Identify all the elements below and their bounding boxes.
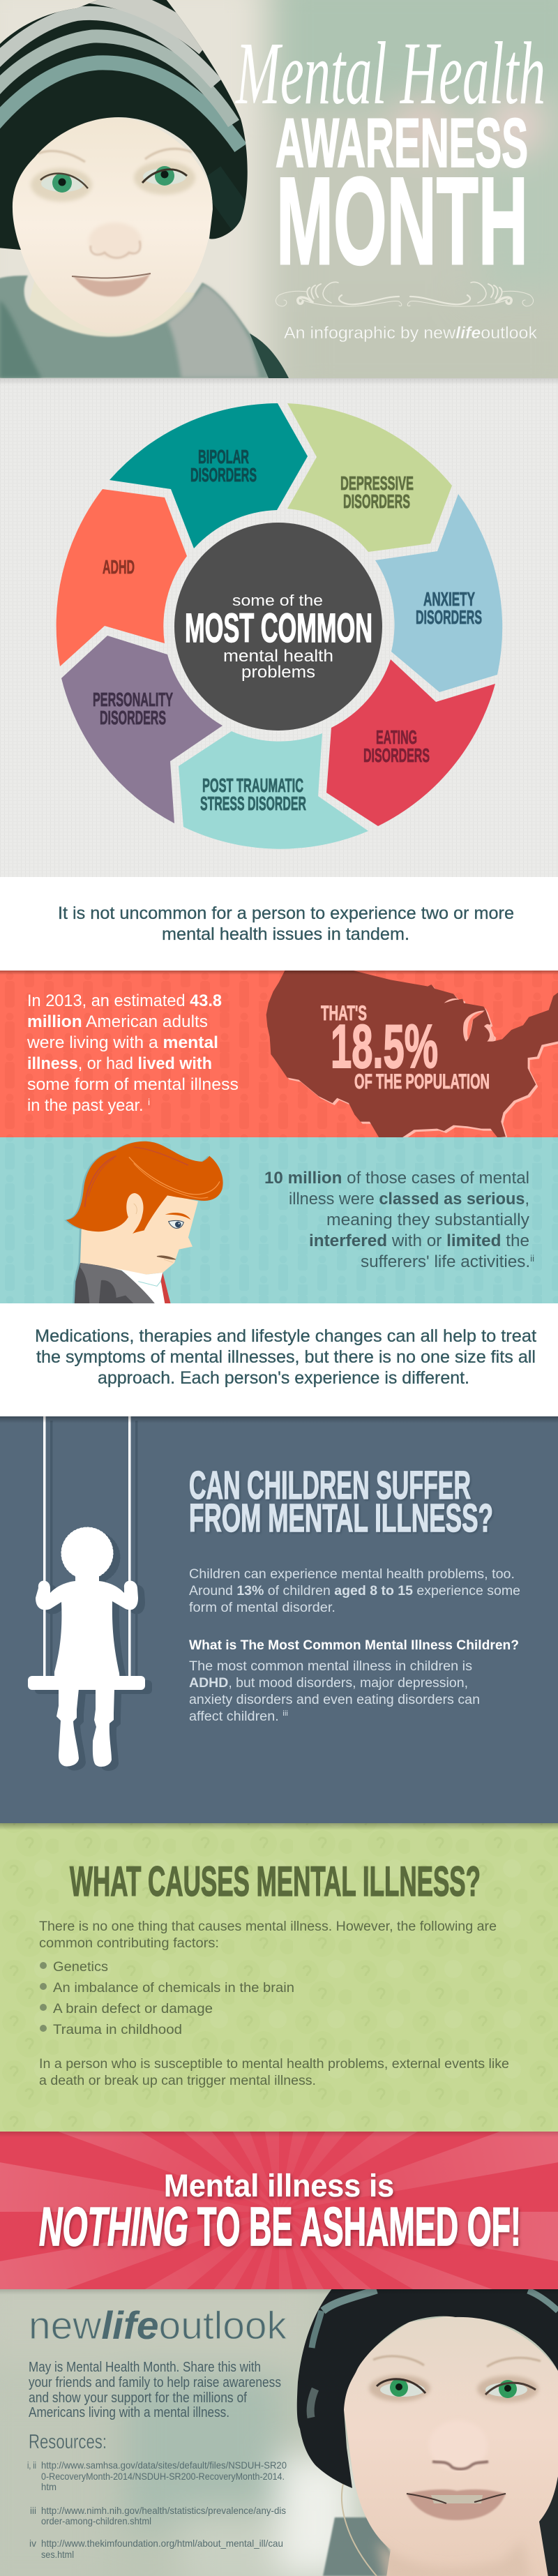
segment: ADHD <box>56 489 187 666</box>
paragraph: ADHD most common: The most common mental illness in children is <box>189 1659 472 1674</box>
paragraph: 43.8 million adults: were living with a mental <box>27 1033 218 1052</box>
paragraph: 10 million serious: illness were classed as serious, <box>289 1190 529 1208</box>
paragraph: 13 percent of children: form of mental disorder. <box>189 1601 335 1615</box>
resource links: http://www.nimh.nih.gov/health/statistics/prevalence/any-dis <box>41 2505 286 2516</box>
panel: nothing to be ashamed of <box>0 2132 558 2289</box>
panel: white statement 1: mental health issues in tandem. <box>162 924 409 944</box>
resource links: htm <box>41 2481 56 2492</box>
paragraph: ADHD most common: anxiety disorders and even eating disorders can <box>189 1693 480 1707</box>
subheading: most common illness children: What is The Most Common Mental Illness Children? <box>189 1638 519 1653</box>
bullet list: contributing factors: An imbalance of chemicals in the brain <box>53 1981 294 1995</box>
heading: resources: Resources: <box>29 2431 107 2453</box>
segment: anxiety disorders: DISORDERS <box>416 606 482 628</box>
ornament flourish <box>276 282 534 306</box>
center disc label <box>174 523 382 731</box>
resource links: iii <box>30 2505 36 2516</box>
panel: most common problems ring <box>0 378 558 877</box>
paragraph: share this: and show your support for the millions of <box>29 2390 247 2406</box>
map of USA <box>266 971 558 1139</box>
panel: white statement 2: approach. Each person's experience is different. <box>98 1368 469 1388</box>
paragraph: share this <box>29 2360 281 2420</box>
panel: children section <box>0 1416 558 1824</box>
segment: post traumatic stress disorder: POST TRAUMATIC <box>202 774 303 796</box>
panel: teal serious cases <box>0 1137 558 1305</box>
segment: depressive disorders: DEPRESSIVE <box>340 472 414 494</box>
photo: striped knit hat <box>0 0 258 258</box>
panel: white statement 1: It is not uncommon for a person to experience two or more <box>58 904 514 923</box>
panel: what causes mental illness <box>0 1823 558 2132</box>
segment: anxiety disorders: ANXIETY <box>423 588 475 610</box>
paragraph: external events: In a person who is susceptible to mental health problems, external events like <box>39 2057 509 2072</box>
paragraph: 10 million serious: interfered with or limited the <box>309 1231 529 1250</box>
panel: coral statistic <box>0 971 558 1139</box>
panel: white statement 1 <box>0 877 558 971</box>
bullet list: contributing factors: Trauma in childhood <box>53 2023 182 2037</box>
stat text: THAT'S <box>321 1002 367 1025</box>
paragraph: 13 percent of children <box>189 1567 520 1615</box>
section edge shadows <box>0 378 558 2295</box>
segment: bipolar disorders: DISORDERS <box>190 464 257 486</box>
paragraph: 13 percent of children: Around 13% of children aged 8 to 15 experience some <box>189 1584 520 1598</box>
segment: anxiety disorders <box>375 494 502 692</box>
paragraph: 10 million serious: sufferers' life activities. <box>361 1252 528 1271</box>
paragraph: ADHD most common: iii <box>282 1709 288 1718</box>
segment: depressive disorders <box>287 403 452 552</box>
center disc label: some of the <box>232 592 323 609</box>
segment: post traumatic stress disorder: STRESS DISORDER <box>200 793 306 814</box>
illustration: child on swing <box>28 1416 145 1767</box>
paragraph: 10 million serious: 10 million of those cases of mental <box>264 1169 529 1188</box>
resource links: http://www.samhsa.gov/data/sites/default/files/NSDUH-SR20 <box>41 2459 287 2471</box>
paragraph: 43.8 million adults: i <box>148 1097 150 1107</box>
resource links: i, ii <box>27 2459 36 2471</box>
hero photo background <box>0 0 558 419</box>
paragraph: external events: a death or break up can trigger mental illness. <box>39 2074 316 2088</box>
paragraph: 10 million serious: meaning they substantially <box>326 1211 529 1229</box>
stat text: 18.5% <box>331 1012 438 1081</box>
segment: post traumatic stress disorder <box>179 731 368 849</box>
paragraph: 43.8 million adults: In 2013, an estimated 43.8 <box>27 991 222 1010</box>
segment: depressive disorders: DISORDERS <box>343 491 410 512</box>
bullet list: contributing factors: A brain defect or damage <box>53 2002 213 2016</box>
resource links <box>27 2459 287 2560</box>
paragraph: 43.8 million adults: illness, or had lived with <box>27 1054 212 1073</box>
segment: personality disorders: DISORDERS <box>100 707 166 728</box>
heading: can children suffer <box>189 1463 493 1541</box>
callout text <box>38 2173 521 2249</box>
stat text <box>321 1002 490 1093</box>
panel: footer <box>0 2275 558 2576</box>
paragraph: ADHD most common: affect children. <box>189 1709 275 1724</box>
segment: bipolar disorders <box>110 403 308 548</box>
paragraph: 10 million serious <box>264 1169 534 1271</box>
segment: bipolar disorders: BIPOLAR <box>198 446 249 467</box>
paragraph: 43.8 million adults: in the past year. <box>27 1096 145 1115</box>
resource links: http://www.thekimfoundation.org/html/about_mental_ill/cau <box>41 2538 283 2549</box>
paragraph: no one thing: There is no one thing that causes mental illness. However, the following are <box>39 1919 497 1934</box>
segment: eating disorders <box>326 659 495 826</box>
resource links: order-among-children.shtml <box>41 2515 151 2526</box>
photo: woman neck and scarf <box>0 276 289 378</box>
photo: woman face <box>13 117 212 334</box>
paragraph: 43.8 million adults <box>27 991 239 1115</box>
bullet list: contributing factors <box>40 1960 294 2037</box>
callout text: Mental illness is <box>164 2168 394 2203</box>
segment: personality disorders: PERSONALITY <box>93 689 173 710</box>
footer photo background <box>0 2275 356 2576</box>
paragraph: 43.8 million adults: million American adults <box>27 1012 208 1031</box>
resource links: iv <box>29 2538 36 2549</box>
segment: eating disorders: EATING <box>376 726 417 748</box>
paragraph: share this: May is Mental Health Month. Share this with <box>29 2360 261 2375</box>
photo: dark knit hat <box>297 2285 558 2488</box>
paragraph: share this: your friends and family to help raise awareness <box>29 2375 281 2390</box>
paragraph: no one thing <box>39 1919 497 1951</box>
paragraph: ADHD most common: ADHD, but mood disorders, major depression, <box>189 1676 468 1691</box>
photo: woman scarf and hair <box>323 2477 558 2576</box>
paragraph: no one thing: common contributing factors: <box>39 1936 219 1951</box>
callout text: NOTHING <box>39 2196 188 2257</box>
bullet list: contributing factors: Genetics <box>53 1960 108 1975</box>
segment: ADHD: ADHD <box>103 556 135 578</box>
paragraph: 13 percent of children: Children can experience mental health problems, too. <box>189 1567 515 1582</box>
paragraph: 43.8 million adults: some form of mental illness <box>27 1075 239 1094</box>
resource links: 0-RecoveryMonth-2014/NSDUH-SR200-RecoveryMonth-2014. <box>41 2471 285 2482</box>
paragraph: ADHD most common <box>189 1659 480 1724</box>
paragraph: external events <box>39 2057 509 2088</box>
paragraph: 10 million serious: ii <box>530 1253 534 1264</box>
segment: personality disorders <box>61 636 223 823</box>
photo: woman face <box>344 2315 558 2576</box>
logo: newlifeoutlook: newlifeoutlook <box>29 2303 287 2347</box>
panel: hero banner <box>0 0 558 419</box>
segment: eating disorders: DISORDERS <box>363 744 430 766</box>
center disc label: MOST COMMON <box>185 606 372 651</box>
panel: white statement 2: Medications, therapies and lifestyle changes can all help to treat <box>35 1326 536 1346</box>
center disc label: problems <box>241 663 315 682</box>
illustration: sad man <box>66 1141 223 1305</box>
byline: An infographic by new lifeoutlook <box>284 324 538 343</box>
panel: white statement 2 <box>0 1303 558 1416</box>
panel: white statement 2: the symptoms of mental illnesses, but there is no one size fits all <box>36 1347 536 1367</box>
center disc label: mental health <box>223 647 333 666</box>
resource links: ses.html <box>41 2549 74 2560</box>
paragraph: share this: Americans living with a mental illness. <box>29 2405 229 2420</box>
sunburst rays <box>0 2132 558 2289</box>
